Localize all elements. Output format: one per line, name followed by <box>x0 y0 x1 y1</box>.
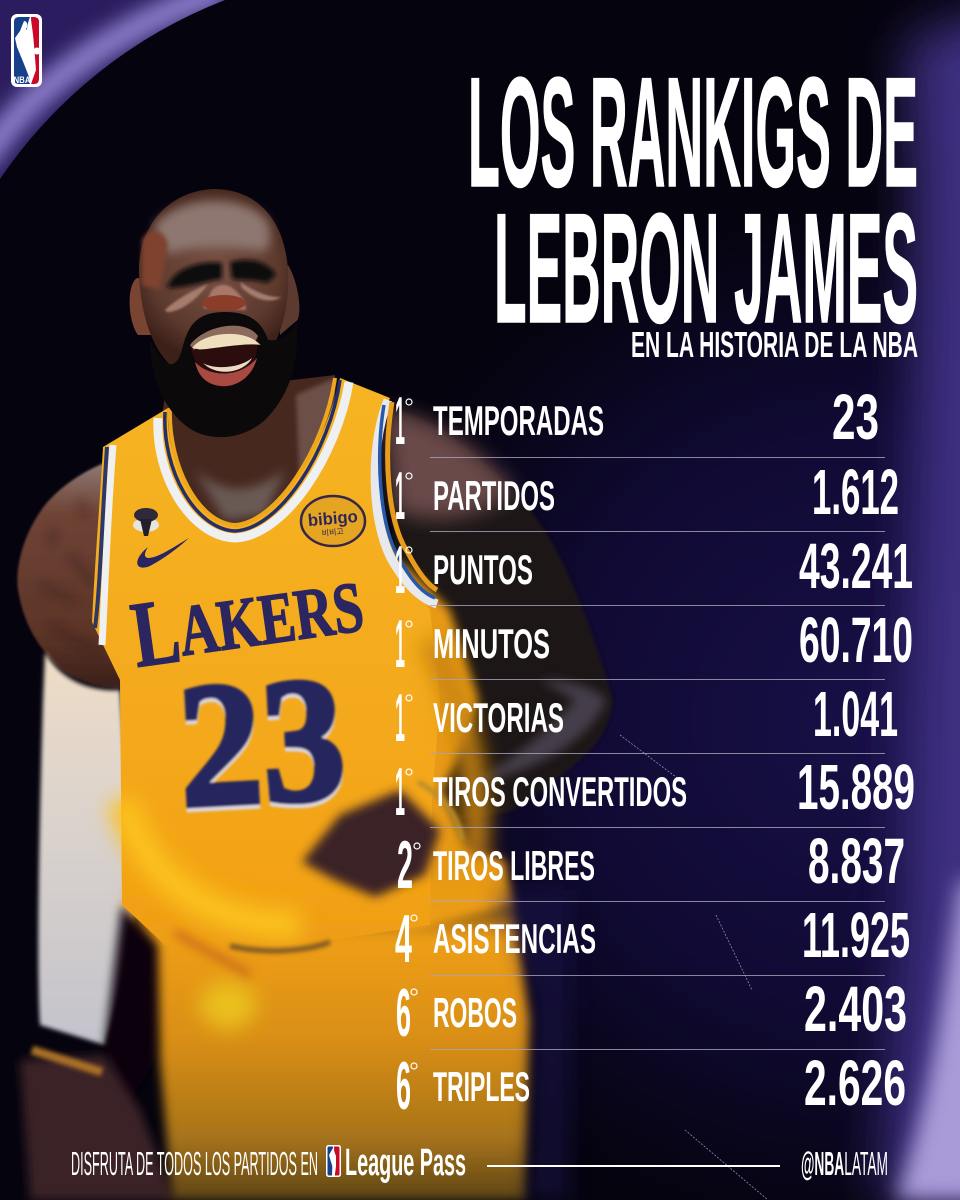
forehead light <box>155 201 270 254</box>
upper lip and teeth <box>190 326 258 350</box>
row: asistencias: 4 <box>395 901 412 977</box>
swoosh <box>137 538 189 568</box>
right arm <box>385 408 613 825</box>
collar trim <box>158 382 349 538</box>
ears <box>130 278 152 335</box>
row: minutos <box>395 604 913 682</box>
row: tiros libres: TIROS LIBRES <box>433 842 595 889</box>
row: triples: 2.626 <box>804 1047 906 1119</box>
bibigo badge: bibigo <box>307 507 359 530</box>
skull <box>139 189 288 365</box>
hand <box>302 790 440 897</box>
white arm sleeve <box>38 652 135 1045</box>
mouth <box>190 328 258 385</box>
row: tiros convertidos: TIROS CONVERTIDOS <box>433 768 687 815</box>
row: partidos: PARTIDOS <box>433 472 555 519</box>
row: temporadas: TEMPORADAS <box>433 397 604 444</box>
bibigo badge: 비비고 <box>321 527 344 538</box>
right armhole trim <box>375 400 437 604</box>
row: triples: 6 <box>396 1048 411 1124</box>
head <box>130 189 299 437</box>
LAKERS wordmark <box>125 553 370 688</box>
row: partidos <box>395 456 899 534</box>
LAKERS wordmark: L <box>125 576 202 688</box>
lower lip <box>195 358 257 386</box>
row: asistencias: ASISTENCIAS <box>433 915 596 962</box>
jersey number 23: 23 <box>174 643 350 849</box>
logo: NBA <box>11 14 42 87</box>
cheek creases <box>165 284 208 312</box>
neck and chest <box>160 375 335 531</box>
footer <box>71 1142 888 1184</box>
title <box>468 46 918 356</box>
wrist and hand <box>20 1055 175 1200</box>
row: robos <box>396 973 907 1051</box>
row: robos: ROBOS <box>433 989 517 1036</box>
ranking table <box>395 381 915 1124</box>
jersey side blur <box>380 560 512 935</box>
beard <box>150 312 297 437</box>
row: temporadas: 1 <box>395 383 405 459</box>
LAKERS wordmark: AKERS <box>174 566 368 671</box>
row: tiros libres: 2 <box>397 827 413 903</box>
purple fade over lower right <box>495 890 570 1200</box>
icon: league pass logo <box>326 1145 341 1177</box>
row: victorias: 1 <box>395 680 405 756</box>
row: puntos: 1 <box>395 532 405 608</box>
row: puntos <box>395 530 913 608</box>
row: victorias <box>395 678 898 756</box>
dark arm shadow <box>105 905 165 1110</box>
jersey folds <box>122 800 300 925</box>
row dividers <box>430 458 885 1050</box>
nose <box>203 285 246 310</box>
player photo illustration <box>17 189 613 1200</box>
row: temporadas <box>395 381 879 459</box>
row: asistencias <box>395 899 910 977</box>
bibigo badge <box>301 496 365 546</box>
row: tiros convertidos: 1 <box>395 754 405 830</box>
row: triples: TRIPLES <box>433 1063 530 1110</box>
row: puntos: PUNTOS <box>433 546 533 593</box>
jersey number 23: 23 <box>174 639 350 845</box>
divider line <box>487 1165 780 1167</box>
row: temporadas: 23 <box>832 381 879 453</box>
row: tiros convertidos <box>395 751 915 830</box>
row: robos: 6 <box>396 975 411 1051</box>
logo: NBA: NBA <box>14 75 31 86</box>
handle: @NBALATAM <box>801 1145 888 1182</box>
row: partidos: 1 <box>395 458 405 534</box>
jersey body <box>92 378 440 945</box>
scratches <box>620 735 768 1200</box>
patch <box>133 508 159 536</box>
row: tiros libres <box>397 825 905 903</box>
row: minutos: 1 <box>395 606 405 682</box>
left arm with tattoos <box>17 463 125 688</box>
row: minutos: MINUTOS <box>433 620 550 667</box>
row: victorias: VICTORIAS <box>433 694 564 741</box>
left armhole trim <box>102 445 113 645</box>
brows and eyes <box>167 262 222 288</box>
row: triples <box>396 1047 906 1124</box>
row: robos: 2.403 <box>804 973 907 1045</box>
league pass wordmark: League Pass <box>345 1142 466 1184</box>
shorts <box>122 880 530 1200</box>
footer: DISFRUTA DE TODOS LOS PARTIDOS EN <box>71 1145 318 1182</box>
